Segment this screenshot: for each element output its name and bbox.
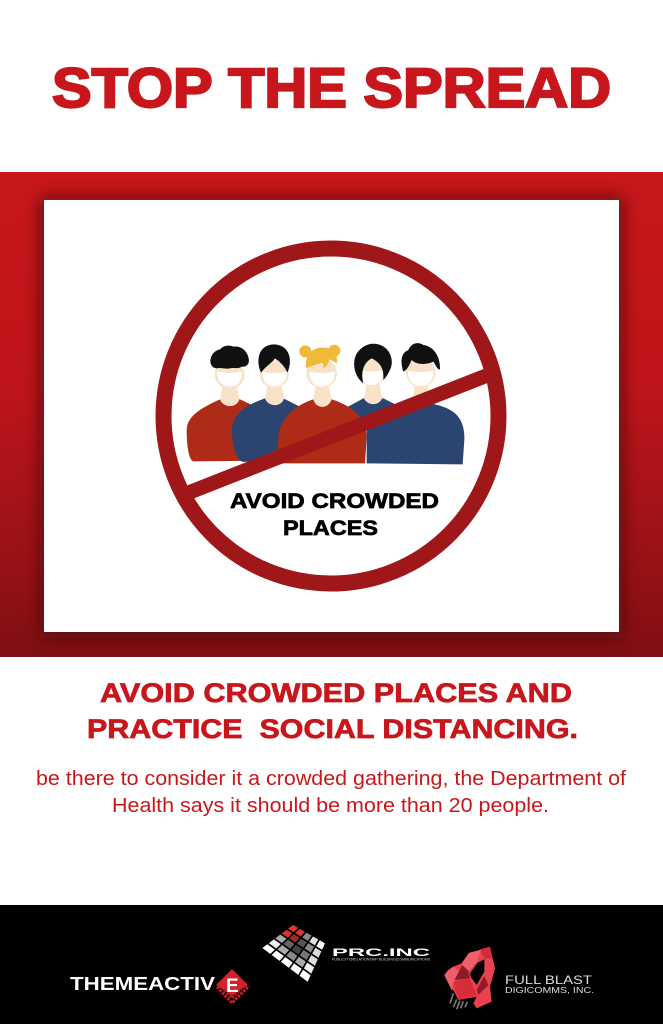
panel: white card xyxy=(44,200,619,632)
heading: avoid crowded places: AVOID CROWDED PLACES AND xyxy=(100,678,572,708)
logo: PRC.INC wordmark: PUBLICITY|RELATIONSHIP BUILDING|COMMUNICATIONS xyxy=(332,956,430,962)
panel: red gradient band xyxy=(0,172,663,657)
person 4 xyxy=(347,344,403,430)
logo: PRC grid icon xyxy=(261,924,326,983)
logo: PRC.INC wordmark xyxy=(332,947,430,962)
person 5 xyxy=(367,343,464,464)
body text xyxy=(36,768,626,817)
logo: Full Blast wordmark: DIGICOMMS, INC. xyxy=(505,985,594,995)
logo: PRC.INC wordmark: PRC.INC xyxy=(332,947,430,959)
icon: prohibition ring and slash xyxy=(164,248,498,584)
logo: Full Blast wordmark: FULL BLAST xyxy=(505,975,592,987)
person 3 xyxy=(278,345,367,463)
sign text: AVOID CROWDED xyxy=(230,490,439,513)
sign text: PLACES xyxy=(283,517,378,540)
sign text xyxy=(230,490,439,540)
person 1 xyxy=(187,346,270,461)
footer bar xyxy=(0,905,663,1024)
heading: avoid crowded places xyxy=(87,678,578,744)
person 2 xyxy=(232,344,313,462)
title: STOP THE SPREAD xyxy=(52,56,611,119)
body text: be there to consider it a crowded gathering, the Department of xyxy=(36,768,626,790)
logo: Themeactive: THEMEACTIV xyxy=(70,974,215,994)
logo: Full Blast wordmark xyxy=(505,975,594,995)
logo: Themeactive: E xyxy=(226,976,239,997)
body text: Health says it should be more than 20 people. xyxy=(112,795,549,817)
illustration: five masked people xyxy=(187,343,464,464)
logo: Themeactive xyxy=(70,969,249,1003)
heading: avoid crowded places: PRACTICE SOCIAL DISTANCING. xyxy=(87,714,578,744)
logo: Full Blast icon xyxy=(444,947,495,1009)
